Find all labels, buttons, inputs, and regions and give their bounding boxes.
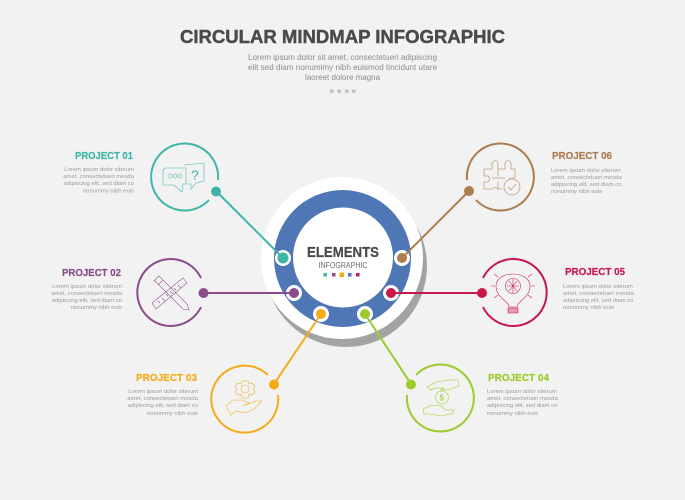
text 04: Lorem ipsum dolor siterum [487,389,557,395]
text 04 [487,389,558,417]
text 06: nonummy nibh euis [551,189,602,195]
connector 06 [394,186,474,266]
project 03 [127,306,329,433]
ring 06 [467,144,534,211]
ring 05 [483,259,547,326]
subtitle text: Lorem ipsum dolor sit amet, consectetueri adipiscing [248,52,437,62]
text 03: nonummy nibh euis [147,411,198,417]
ring 02 [137,259,201,326]
project 01 [63,144,291,266]
project 02 [51,259,302,326]
text 02: Lorem ipsum dolor siterum [52,284,122,290]
text 03 [127,389,199,417]
subtitle text [248,52,437,82]
text 01: adipiscing elit, sed diam co [64,181,135,187]
project 06 [394,144,622,266]
ring 01 [151,144,218,211]
icon: hand and gear [226,381,262,415]
text 04: amet, consectetueri mesda [487,396,558,402]
project 05 [383,259,634,326]
text 01: Lorem ipsum dolor siterum [64,167,134,173]
text 01: amet, consectetueri mesda [63,174,135,180]
subtitle text: elit sed diam nonumimy nibh euismod tincidunt utare [248,62,437,72]
text 01 [63,167,135,194]
connector 05 [383,285,487,301]
connector 03 [269,306,329,390]
icon: hands and coin: $ [440,394,444,402]
hub label: ELEMENTS [307,245,379,261]
ring 04 [407,364,474,431]
connector 02 [198,285,302,301]
text 05: Lorem ipsum dolor siterum [563,284,633,290]
label 01: PROJECT 01 [75,150,133,162]
connector 04 [357,306,416,390]
text 02: amet, consectetueri mesda [51,291,123,297]
icon: ruler and pencil [152,276,189,310]
icon: speech bubbles [163,163,204,192]
icon: speech bubbles: ? [191,167,199,183]
label 02: PROJECT 02 [62,267,121,279]
text 06 [551,168,622,195]
connector 01 [211,186,291,266]
title: CIRCULAR MINDMAP INFOGRAPHIC [180,26,505,47]
text 06: amet, consectetueri mesda [551,175,622,181]
text 04: adipiscing elit, sed diam co [487,403,558,409]
text 05: nonummy nibh euis [563,305,614,311]
text 03: amet, consectetueri mesda [127,396,199,402]
subtitle text: laoreet dolore magna [305,72,380,82]
text 02: nonummy nibh euis [71,305,122,311]
icon: hands and coin [423,380,459,416]
text 06: adipiscing elit, sed diam co [551,182,622,188]
ring 03 [211,366,278,433]
label 03: PROJECT 03 [136,372,197,384]
label 06: PROJECT 06 [552,150,612,162]
text 03: Lorem ipsum dolor siterum [128,389,198,395]
icon: light bulb with brain [491,274,535,313]
text 02: adipiscing elit, sed diam co [52,298,123,304]
text 05: adipiscing elit, sed diam co [563,298,634,304]
decorative title dots [330,90,356,93]
project 04 [357,306,558,431]
text 02 [51,284,123,311]
text 05: amet, consectetueri mesda [563,291,634,297]
label 05: PROJECT 05 [565,266,625,278]
text 06: Lorem ipsum dolor siterum [551,168,621,174]
text 04: nonummy nibh euis [487,411,538,417]
text 05 [563,284,634,311]
icon: puzzle and check [484,161,520,195]
hub colour squares [324,272,360,277]
text 01: nonummy nibh euis [83,188,134,194]
hub sublabel: INFOGRAPHIC [318,261,368,270]
central hub [261,177,427,347]
label 04: PROJECT 04 [488,372,549,384]
text 03: adipiscing elit, sed diam co [128,403,199,409]
